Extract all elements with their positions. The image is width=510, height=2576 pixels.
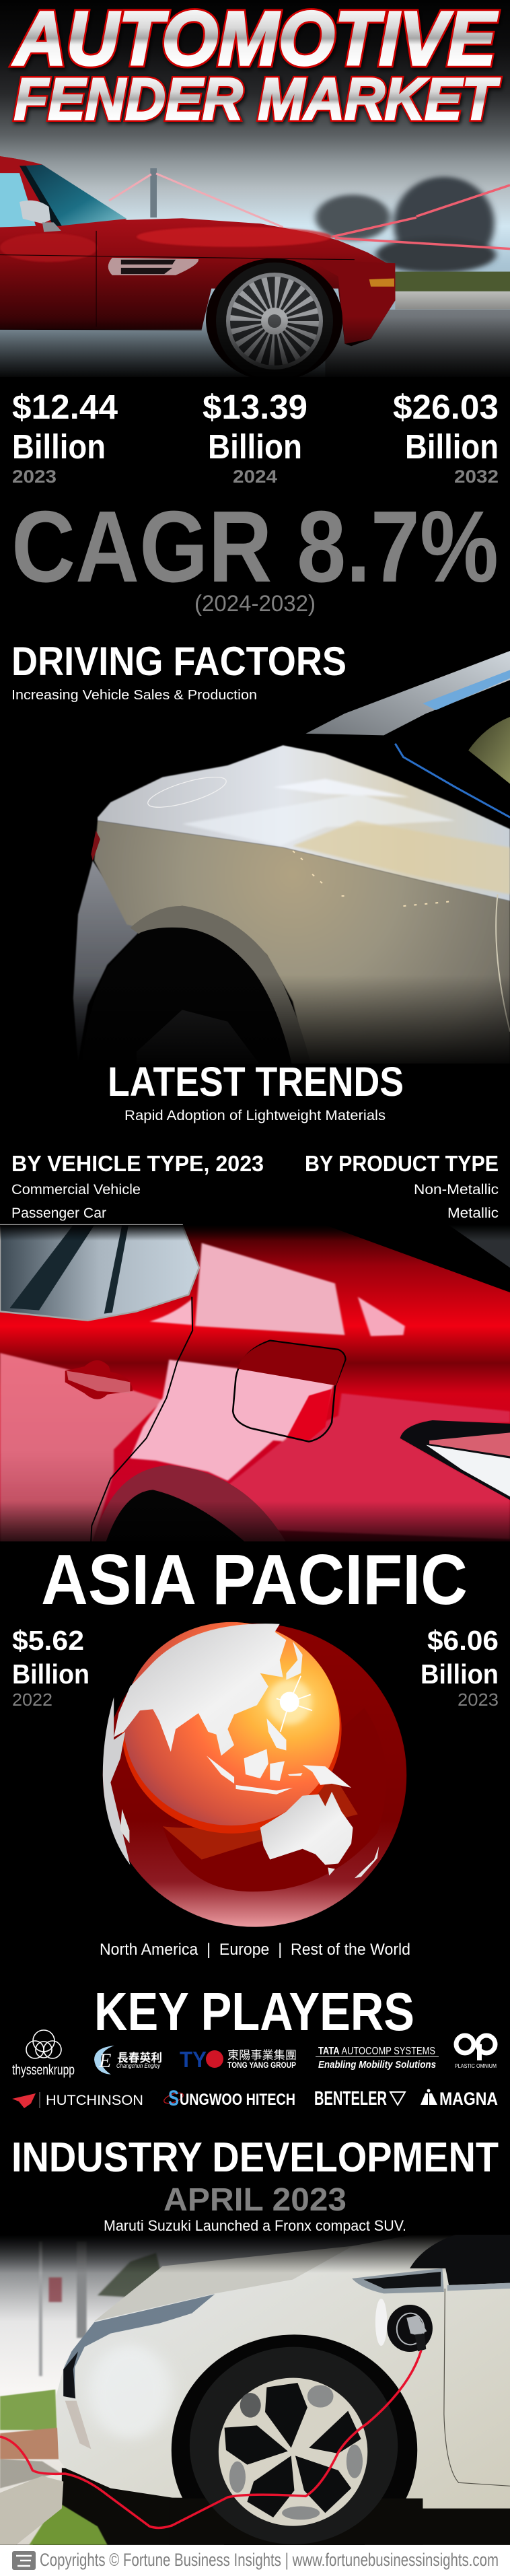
rear window: [468, 717, 510, 784]
photo: electric car charging: [0, 2235, 510, 2566]
heading: asia pacific: ASIA PACIFIC: [41, 1540, 468, 1620]
title: FENDER MARKET: [14, 67, 500, 132]
development detail: Maruti Suzuki Launched a Fronx compact SUV.: [104, 2217, 406, 2234]
logo: Changchun Engley: Changchun Engley: [116, 2062, 161, 2070]
red reflection in fuel door: [286, 1389, 332, 1440]
logo: Changchun Engley: E: [98, 2050, 111, 2072]
car body: [56, 2235, 510, 2509]
logo: Tata AutoComp Systems: [316, 2046, 439, 2070]
top right background: [449, 1225, 510, 1267]
logo: Tata AutoComp Systems: Enabling Mobility Solutions: [318, 2059, 436, 2070]
charging cable: [0, 2351, 421, 2528]
market stat: 2032: [393, 388, 499, 487]
sphere base: [103, 1624, 406, 1927]
logo: Sungwoo Hitech: UNGWOO HITECH: [180, 2091, 295, 2109]
door handle: [65, 1360, 133, 1399]
market stat: 2023: 2023: [12, 466, 57, 487]
land: Asia: [114, 1624, 286, 1755]
glowing hemisphere: [122, 1625, 342, 1834]
market stat: 2024: Billion: [208, 427, 302, 466]
regional stat: 2023: $6.06: [427, 1625, 499, 1656]
land: Madagascar: [120, 1809, 129, 1843]
indicator light: [369, 279, 394, 287]
wheel: [137, 1010, 260, 1065]
segment: by vehicle type: [11, 1151, 264, 1221]
land: left edge: [103, 1697, 130, 1865]
segment: by vehicle type: BY VEHICLE TYPE, 2023: [11, 1151, 264, 1176]
door mirror and window: [410, 2235, 510, 2285]
lower fender panel: [94, 821, 510, 1068]
bright body panel: [88, 2344, 172, 2439]
grass and flower bed: [0, 2390, 60, 2488]
market stat: 2023: Billion: [12, 427, 106, 466]
logo: thyssenkrupp: [12, 2030, 75, 2078]
logo: thyssenkrupp: thyssenkrupp: [12, 2062, 75, 2078]
CAGR period: (2024-2032): [194, 591, 316, 617]
market stat: 2023: [12, 388, 118, 487]
rim: [219, 2378, 367, 2526]
logo: Tong Yang Group: [180, 2047, 297, 2072]
wheel arch: [172, 2334, 417, 2566]
logo: Sungwoo Hitech: S: [168, 2086, 179, 2110]
market stat: 2023: $12.44: [12, 388, 118, 426]
segment: by product type: [305, 1151, 499, 1221]
car body: [0, 156, 395, 381]
tyre: [190, 2347, 398, 2544]
market stat: 2032: $26.03: [393, 388, 499, 426]
logo: Changchun Engley: 長春英利: [117, 2051, 162, 2064]
segment: by vehicle type: Passenger Car: [11, 1206, 106, 1221]
door seam: [90, 1297, 192, 1553]
photo: silver car rear fender: [0, 651, 510, 1072]
footer: [0, 2545, 510, 2576]
door shut line: [444, 2289, 510, 2486]
side mirror: [20, 201, 50, 223]
market stat: 2032: 2032: [454, 466, 499, 487]
car roof: [305, 651, 510, 735]
reflections on the red panel: [0, 1243, 510, 1548]
regional stat: 2022: Billion: [12, 1659, 89, 1690]
heading: latest trends: LATEST TRENDS: [108, 1059, 404, 1105]
fuel cap outline: [145, 771, 229, 813]
regional stat: 2023: [421, 1625, 499, 1710]
regional stat: 2022: [12, 1625, 89, 1710]
wheel arch: [81, 928, 293, 1068]
land: Australia: [260, 1792, 353, 1865]
driving factor detail: Increasing Vehicle Sales & Production: [11, 688, 257, 703]
door glass: [0, 1225, 199, 1321]
tail light: [400, 1420, 510, 1500]
bridge tower and cables: [109, 168, 283, 227]
background trees: [316, 176, 496, 273]
segment: by product type: BY PRODUCT TYPE: [305, 1151, 499, 1176]
wheel arch: [206, 258, 342, 381]
logo: Benteler: BENTELER: [314, 2088, 387, 2110]
logo: Plastic Omnium: [455, 2035, 497, 2069]
land: Southeast Asia islands: [207, 1718, 351, 1795]
other regions: North America | Europe | Rest of the World: [100, 1941, 410, 1959]
heading: key players: KEY PLAYERS: [94, 1982, 414, 2042]
regional stat: 2022: $5.62: [12, 1625, 84, 1656]
background trees and poles: [39, 2241, 163, 2376]
hero photo: red sports car: [0, 0, 510, 381]
title: [12, 0, 500, 132]
development date: APRIL 2023: [163, 2182, 347, 2218]
segment: by product type: Non-Metallic: [414, 1182, 499, 1197]
regional stat: 2023: 2023: [458, 1690, 499, 1710]
logo: Plastic Omnium: PLASTIC OMNIUM: [455, 2062, 497, 2069]
logo: Magna: MAGNA: [439, 2089, 498, 2109]
bumper side: [73, 861, 140, 1061]
logo: Sungwoo Hitech: [163, 2086, 295, 2110]
globe: [103, 1622, 406, 1927]
photo: red car fuel door: [0, 1225, 510, 1562]
curb: [0, 2476, 63, 2545]
footer logo: [12, 2551, 36, 2570]
red panel: [0, 1225, 510, 1562]
logo: Hutchinson: HUTCHINSON: [46, 2093, 143, 2108]
segment: by product type: Metallic: [447, 1206, 499, 1221]
sun flare: [267, 1676, 312, 1732]
highlights: [293, 851, 456, 906]
regional stat: 2023: Billion: [421, 1659, 499, 1690]
fuel door: [233, 1341, 345, 1442]
wheel arch: [91, 1465, 289, 1553]
segment: by vehicle type: Commercial Vehicle: [11, 1182, 141, 1197]
hood: [94, 2246, 353, 2321]
regional stat: 2022: 2022: [12, 1690, 52, 1710]
windshield and side glass: [23, 165, 127, 226]
market stat: 2032: Billion: [405, 427, 499, 466]
logo: Magna: [421, 2089, 498, 2109]
market stat: 2024: 2024: [233, 466, 277, 487]
land: Japan: [286, 1641, 303, 1680]
logo: Changchun Engley: [94, 2046, 162, 2075]
logo: Tong Yang Group: 東陽事業集團: [227, 2049, 297, 2062]
logo: Tong Yang Group: TONG YANG GROUP: [227, 2060, 296, 2070]
charge port: [375, 2299, 433, 2352]
heading: driving factors: DRIVING FACTORS: [11, 639, 347, 684]
grass, curb and pavement: [325, 272, 510, 377]
market stat: 2024: [203, 388, 307, 487]
headlight: [63, 2294, 215, 2396]
logo: Tong Yang Group: TY: [180, 2047, 207, 2072]
logo: Tata AutoComp Systems: TATA AUTOCOMP SYSTEMS: [318, 2046, 435, 2057]
market stat: 2024: $13.39: [203, 388, 307, 426]
upper fender panel: [98, 745, 510, 901]
side vent: [108, 258, 198, 275]
title: FENDER MARKET: [14, 67, 500, 132]
wheel arch lip: [130, 906, 312, 1068]
latest trends detail: Rapid Adoption of Lightweight Materials: [124, 1108, 386, 1123]
panel reflections: [182, 779, 510, 895]
ground shadow: [32, 2468, 510, 2545]
front grass: [30, 2502, 108, 2545]
logo: Hutchinson: [12, 2092, 143, 2108]
front wheel: [216, 263, 333, 380]
tail light: [91, 831, 100, 861]
background street: [0, 2235, 510, 2545]
